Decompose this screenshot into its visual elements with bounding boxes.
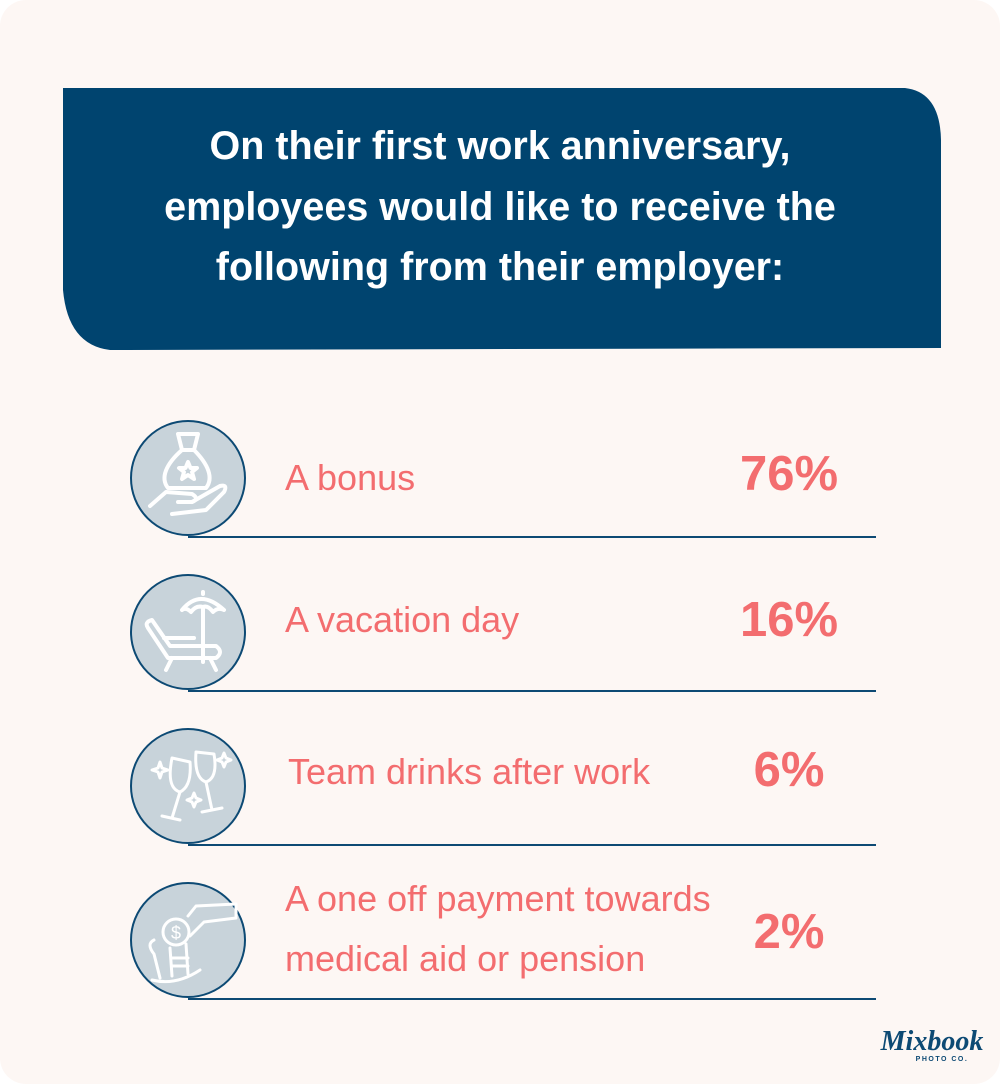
- label: A vacation day: [285, 599, 519, 640]
- title: following from their employer:: [216, 245, 784, 289]
- row: medical aid or pension: [130, 878, 876, 1000]
- logo: Mixbook: PHOTO CO.: [916, 1056, 968, 1063]
- icon: coin and rocking chair: $: [171, 923, 181, 943]
- row: vacation day: [130, 574, 876, 692]
- icon: money bag in hand: [130, 420, 246, 536]
- logo: Mixbook: Mixbook: [881, 1026, 983, 1057]
- icon: beach chair and umbrella: [130, 574, 246, 690]
- value: 6%: [754, 743, 824, 797]
- label: A bonus: [285, 457, 415, 498]
- icon: coin and rocking chair: [130, 882, 246, 998]
- value: 16%: [740, 593, 838, 647]
- row: bonus: [130, 420, 876, 538]
- row: team drinks: [130, 728, 876, 846]
- label: medical aid or pension: [285, 938, 645, 979]
- title: On their first work anniversary,: [210, 124, 790, 168]
- value: 76%: [740, 447, 838, 501]
- icon: champagne glasses: [130, 728, 246, 844]
- title: employees would like to receive the: [164, 184, 836, 228]
- label: Team drinks after work: [288, 751, 650, 792]
- title banner: [63, 88, 941, 350]
- label: [285, 878, 711, 979]
- value: 2%: [754, 905, 824, 959]
- title: [164, 124, 836, 289]
- label: A one off payment towards: [285, 878, 711, 919]
